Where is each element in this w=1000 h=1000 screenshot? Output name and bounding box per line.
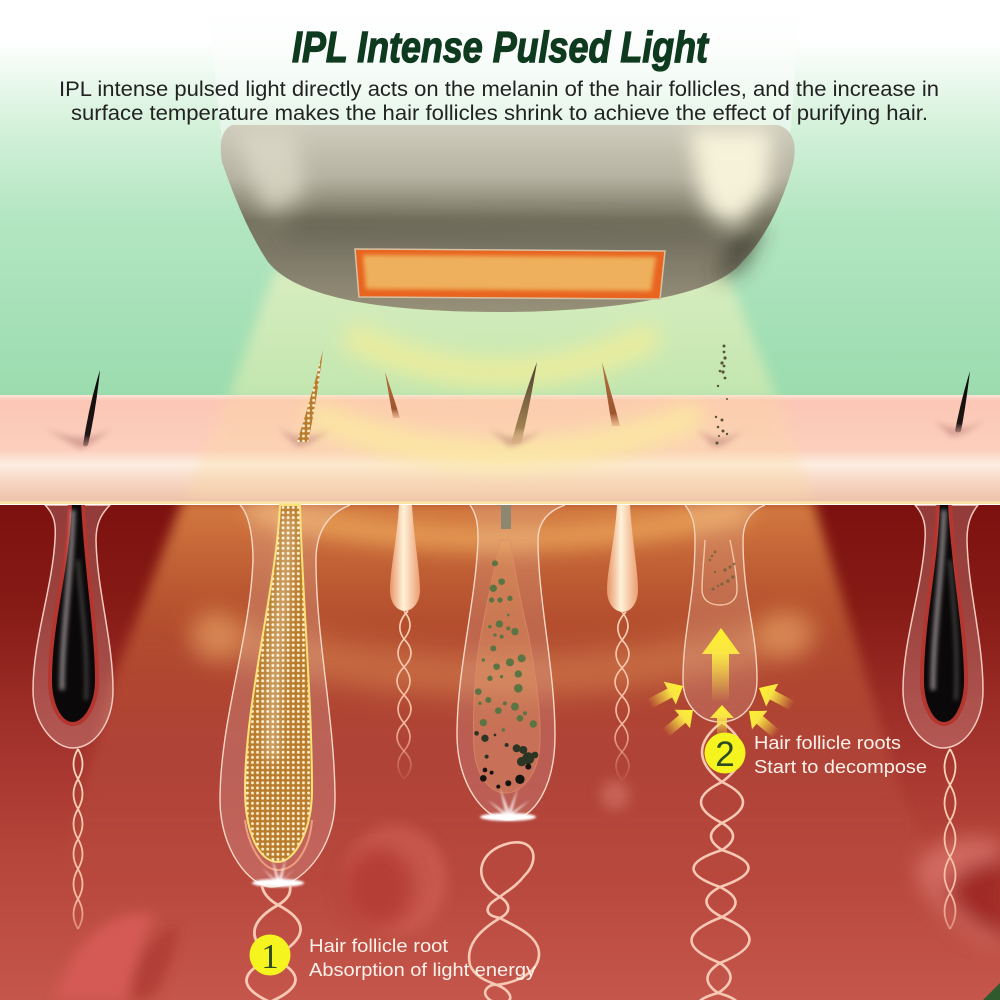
callout 2 xyxy=(704,732,927,777)
hair shaft: small left xyxy=(385,372,400,418)
light waves in dermis xyxy=(191,512,813,676)
follicle: decomposing hair xyxy=(683,505,765,722)
hair shaft: disintegrating dots xyxy=(715,344,728,444)
root: left hair xyxy=(74,749,82,929)
light wave above skin xyxy=(358,340,645,372)
hair stub xyxy=(501,505,511,529)
arrow: inward lower left xyxy=(658,701,701,742)
arrow: inward upper right xyxy=(753,677,799,717)
dermis layer xyxy=(0,500,1000,1000)
highlights on device xyxy=(236,130,772,282)
arrow: inward upper left xyxy=(643,675,689,715)
blood cell: center xyxy=(342,825,447,935)
hair shaft: small right xyxy=(602,362,620,426)
callout 1: Absorption of light energy xyxy=(309,959,537,980)
callout 1: 1 xyxy=(261,937,279,976)
melanin spots xyxy=(474,560,538,789)
root: small hair right xyxy=(615,612,629,780)
follicle: right black hair xyxy=(903,500,983,748)
blood cell: right xyxy=(915,838,1000,950)
blood cell: lower left xyxy=(55,913,178,1000)
dissolving specks xyxy=(709,551,735,591)
hair shaft: right black xyxy=(955,371,970,432)
follicle: breaking-up melanin hair xyxy=(457,505,565,821)
description text xyxy=(59,78,939,125)
device head back xyxy=(207,0,800,140)
light window xyxy=(355,249,665,299)
hair shaft: dotted xyxy=(297,350,323,442)
description text: IPL intense pulsed light directly acts on the melanin of the hair follicles, and the increase in xyxy=(59,78,939,101)
follicle: small hair right xyxy=(607,505,638,612)
light beam above skin xyxy=(228,270,778,400)
hair shaft: left black xyxy=(83,370,100,446)
arrow: inward bottom xyxy=(710,705,734,738)
skin layer xyxy=(0,395,1000,504)
root: melanin hair xyxy=(469,842,539,1000)
follicle: small hair left xyxy=(390,505,420,611)
callout 2: Start to decompose xyxy=(754,756,927,777)
description text: surface temperature makes the hair follicles shrink to achieve the effect of purifying hair. xyxy=(71,102,928,125)
root: right hair xyxy=(944,749,956,929)
device head xyxy=(221,125,795,312)
skin dimples xyxy=(44,420,985,449)
arrow: upward xyxy=(702,628,740,702)
blood cell: faint small xyxy=(600,780,630,810)
corner accent xyxy=(983,983,1000,1000)
callout 2: 2 xyxy=(715,735,735,774)
callout 1 xyxy=(250,934,537,980)
light wave on skin xyxy=(320,418,690,454)
light beam inside dermis xyxy=(92,505,892,798)
root: decomposing hair xyxy=(691,722,750,1000)
callout 2: Hair follicle roots xyxy=(754,732,901,753)
light beam across skin xyxy=(194,395,804,488)
follicle: left black hair xyxy=(33,500,113,748)
root: dotted hair xyxy=(246,886,301,1000)
root: small hair left xyxy=(397,611,411,779)
background: green gradient xyxy=(0,0,1000,395)
follicle: light-absorbing dotted hair xyxy=(220,505,350,887)
title: IPL Intense Pulsed Light xyxy=(292,23,710,72)
sparkle: follicle root xyxy=(480,788,536,821)
hair shaft: center xyxy=(511,362,537,444)
sparkle: follicle root xyxy=(252,858,304,887)
callout 1: Hair follicle root xyxy=(309,935,448,956)
arrow: inward lower right xyxy=(741,702,784,743)
